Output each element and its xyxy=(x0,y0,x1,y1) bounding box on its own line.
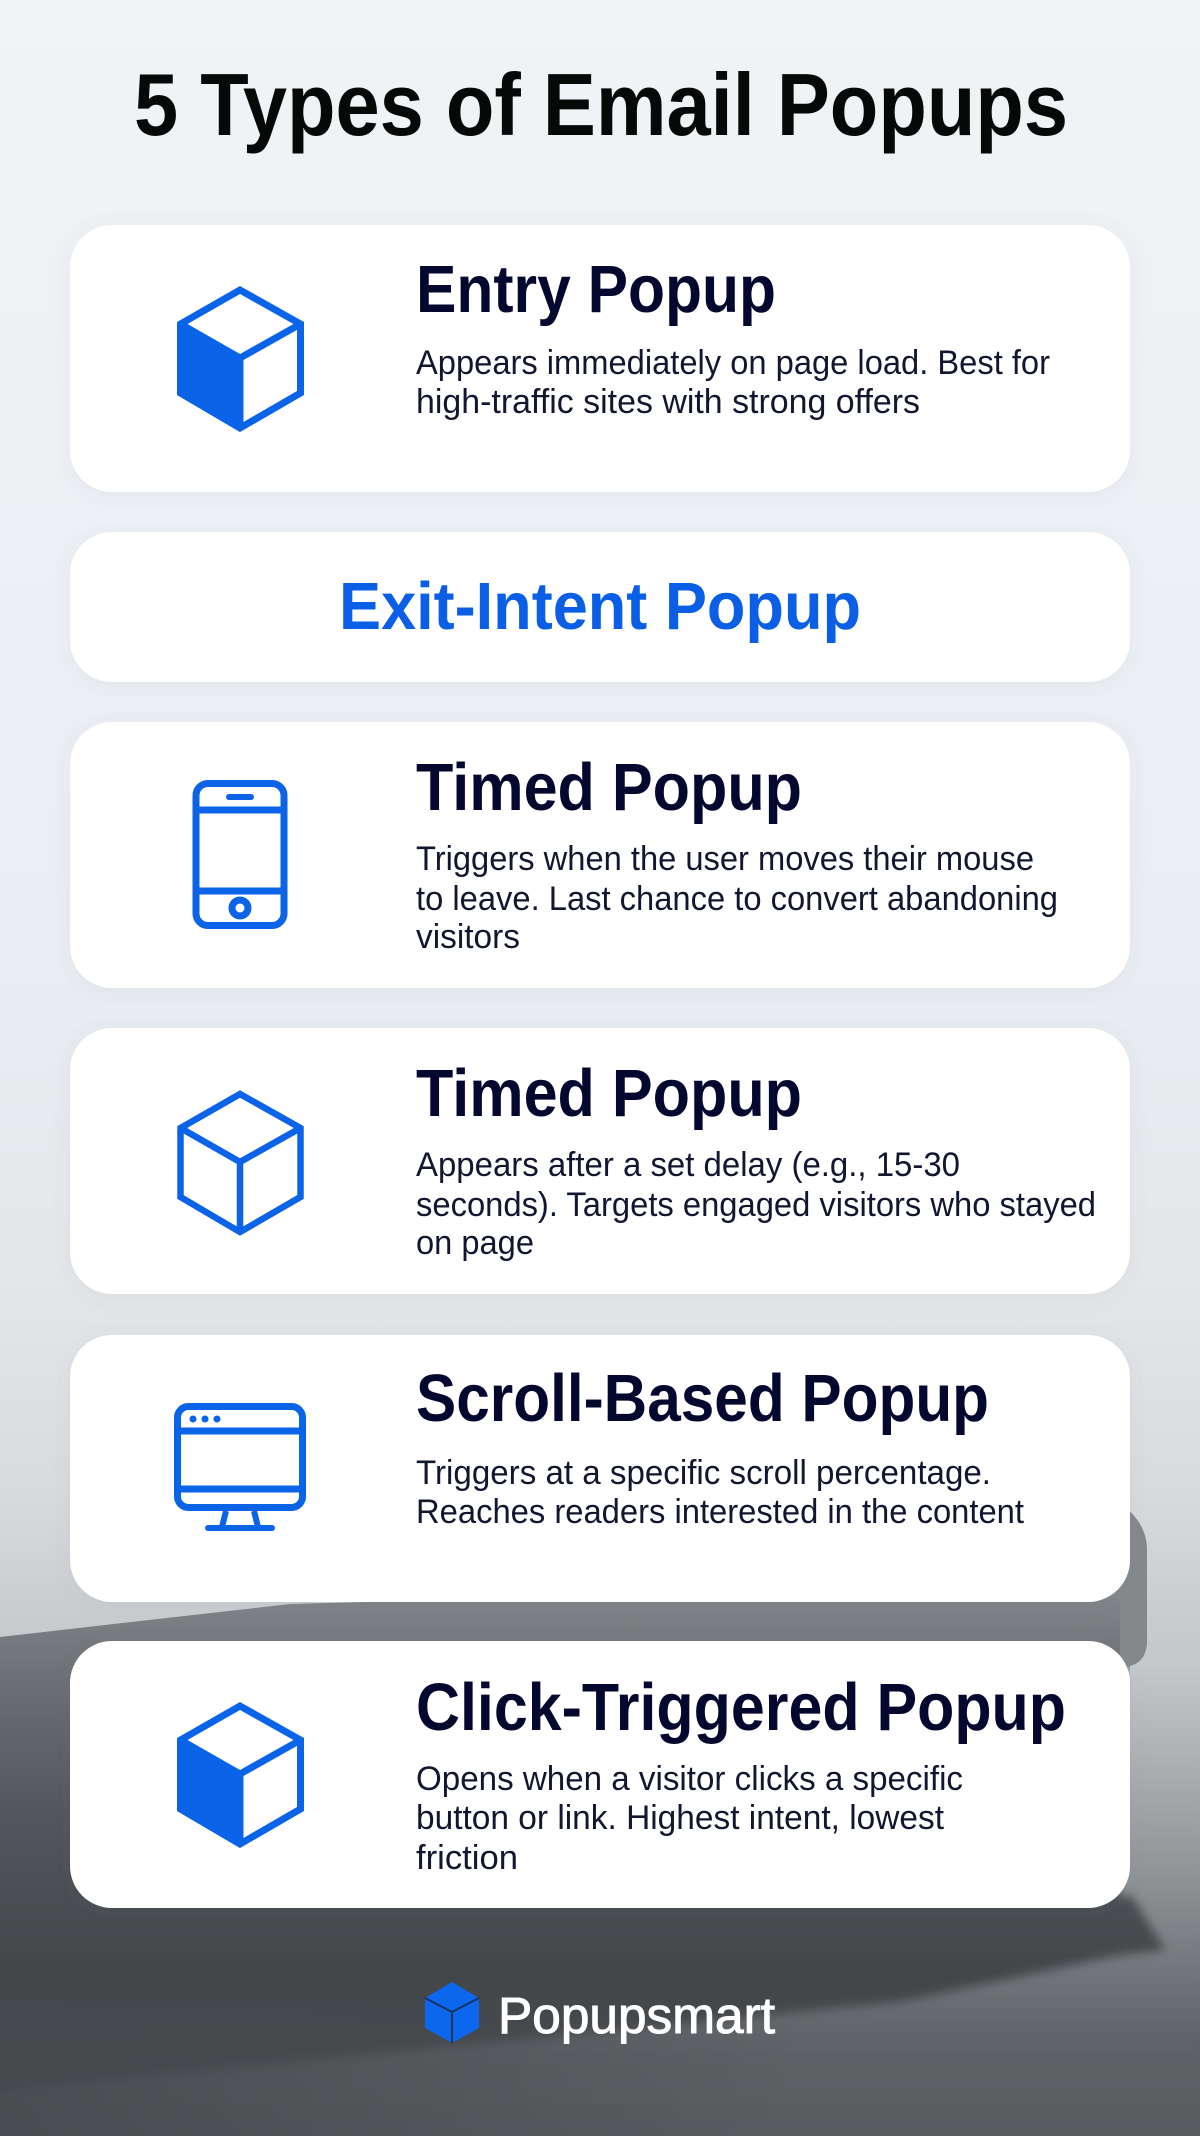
logo: Popupsmart xyxy=(425,1982,775,2044)
card: Click-Triggered Popup xyxy=(70,1641,1130,1908)
card: Timed Popup (mobile) xyxy=(70,722,1130,988)
description xyxy=(416,1146,1096,1262)
description xyxy=(416,1454,1025,1531)
title: 5 Types of Email Popups xyxy=(134,55,1068,154)
heading: Scroll-Based Popup xyxy=(416,1361,989,1436)
heading: Exit-Intent Popup xyxy=(339,569,861,644)
description xyxy=(416,840,1058,956)
description: button or link. Highest intent, lowest xyxy=(416,1799,945,1837)
icon: filled cube xyxy=(177,1706,300,1848)
icon: outline cube xyxy=(180,1094,300,1232)
card: Timed Popup (delay) xyxy=(70,1028,1130,1294)
description xyxy=(416,1760,963,1877)
description: high-traffic sites with strong offers xyxy=(416,383,920,421)
icon: filled cube xyxy=(177,290,300,432)
description: Reaches readers interested in the content xyxy=(416,1493,1025,1531)
description: Triggers at a specific scroll percentage. xyxy=(416,1454,991,1492)
heading: Entry Popup xyxy=(416,252,776,327)
heading: Click-Triggered Popup xyxy=(416,1670,1066,1745)
icon: logo cube xyxy=(425,1982,479,2043)
description xyxy=(416,344,1050,421)
description: Appears after a set delay (e.g., 15-30 xyxy=(416,1146,960,1184)
card: Entry Popup xyxy=(70,225,1130,492)
card: Exit-Intent Popup xyxy=(70,532,1130,682)
description: friction xyxy=(416,1839,518,1877)
description: seconds). Targets engaged visitors who stayed xyxy=(416,1186,1096,1224)
description: Triggers when the user moves their mouse xyxy=(416,840,1034,878)
heading: Timed Popup xyxy=(416,750,802,825)
icon: desktop monitor xyxy=(177,1406,303,1528)
heading: Timed Popup xyxy=(416,1056,802,1131)
description: on page xyxy=(416,1224,534,1262)
description: Opens when a visitor clicks a specific xyxy=(416,1760,963,1798)
description: to leave. Last chance to convert abandoning xyxy=(416,880,1058,918)
card: Scroll-Based Popup xyxy=(70,1335,1130,1602)
wordmark: Popupsmart xyxy=(498,1987,775,2044)
description: Appears immediately on page load. Best for xyxy=(416,344,1050,382)
description: visitors xyxy=(416,918,520,956)
icon: phone xyxy=(196,784,284,926)
